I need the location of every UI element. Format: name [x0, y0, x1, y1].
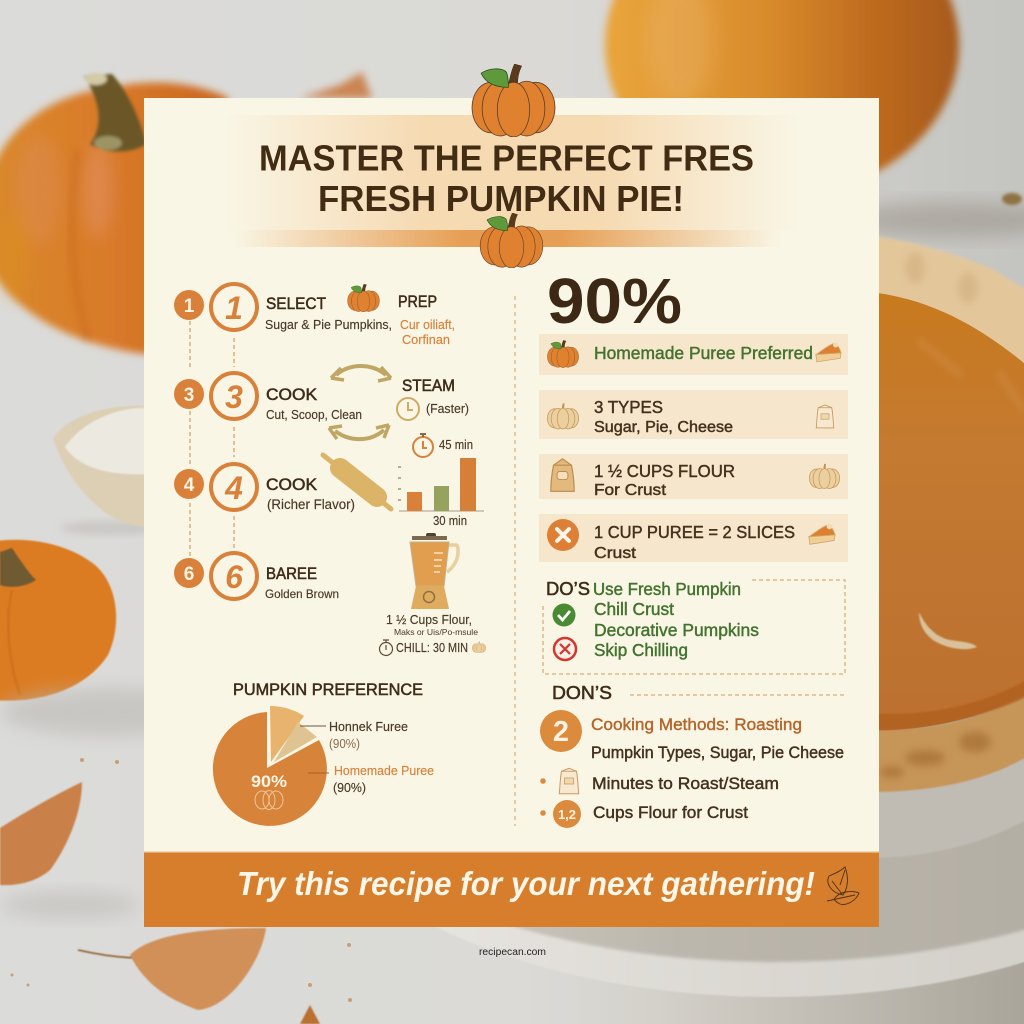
- step 4 badges: 4: [184, 475, 195, 496]
- stat row: flour: For Crust: [594, 482, 667, 499]
- icon: check: [552, 604, 576, 626]
- legend: slice label: [329, 720, 408, 751]
- background: fallen leaf bottom: [78, 928, 320, 1024]
- background: bowl shadow: [60, 521, 160, 535]
- background: pie filling edge shadow: [870, 678, 1024, 730]
- list item: cups flour: [540, 800, 748, 828]
- legend: main label: (90%): [333, 780, 366, 795]
- stat row: homemade puree: [539, 334, 848, 375]
- background: pie dish: [870, 745, 1024, 858]
- step 6 badges: [174, 553, 257, 599]
- list: cooking methods: Cooking Methods: Roasting: [591, 715, 802, 734]
- panel: steps timeline: [174, 284, 486, 656]
- panel background: [144, 98, 879, 927]
- title: FRESH PUMPKIN PIE!: [318, 178, 684, 219]
- list: cooking methods: 2: [553, 716, 569, 748]
- blender caption: 1 ½ Cups Flour,: [386, 612, 472, 627]
- step text: cook richer: COOK: [266, 475, 318, 494]
- step 4 badges: 4: [224, 470, 243, 506]
- icon: chill timer: [380, 640, 392, 656]
- list item: minutes: Minutes to Roast/Steam: [592, 774, 779, 793]
- title: MASTER THE PERFECT FRES: [259, 138, 754, 178]
- stat row: flour: 1 ½ CUPS FLOUR: [594, 461, 735, 481]
- icon: stopwatch: [413, 434, 433, 457]
- icon: rolling pin: [323, 455, 391, 509]
- heading: do's: DO’S: [546, 579, 590, 599]
- background: plate inner: [294, 518, 1024, 962]
- title: [259, 138, 754, 219]
- step 4 badges: [174, 464, 257, 510]
- background: filling highlights: [918, 340, 1024, 410]
- background: crumbs: [10, 758, 352, 1002]
- step text: steam: (Faster): [426, 401, 469, 416]
- step text: cook: Cut, Scoop, Clean: [266, 408, 362, 422]
- icon: clock: [397, 398, 419, 420]
- step text: steam: STEAM: [402, 376, 455, 395]
- stat row: types: Sugar, Pie, Cheese: [594, 419, 733, 436]
- icon: pumpkin below title: [480, 213, 543, 268]
- pie chart: [213, 706, 329, 826]
- arrow: curved top: [331, 366, 391, 381]
- list: do's items: Use Fresh Pumpkin: [593, 579, 741, 599]
- list: do's items: Decorative Pumpkins: [594, 620, 759, 640]
- stat row: puree slices: 1 CUP PUREE = 2 SLICES: [594, 522, 795, 542]
- background: bowl with sugar: [53, 406, 150, 526]
- step text: prep: PREP: [398, 292, 437, 311]
- arrow: curved bottom: [329, 425, 389, 439]
- list: do's items: [593, 579, 759, 660]
- list: do's items: Chill Crust: [594, 599, 674, 619]
- source credit: recipecan.com: [479, 947, 546, 958]
- step 3 badges: [174, 373, 257, 419]
- blender caption: CHILL: 30 MIN: [396, 641, 468, 655]
- background: crust scallop shadows: [905, 252, 978, 304]
- blender caption: [386, 612, 478, 655]
- step 6 badges: 6: [184, 564, 194, 585]
- step 1 badges: 1: [225, 290, 243, 326]
- background: crust browning: [880, 732, 991, 778]
- list: cooking methods: [540, 710, 844, 762]
- icon: leaves: [827, 867, 859, 904]
- background: leaf shadow: [0, 891, 140, 919]
- background: pie crust bottom: [870, 690, 1024, 792]
- panel: recipe card: [144, 64, 879, 927]
- footer band: [144, 851, 879, 927]
- step text: prep: [398, 292, 455, 347]
- step text: prep: Corfinan: [402, 333, 450, 347]
- step 3 badges: 3: [184, 385, 194, 406]
- stat row: types: 3 TYPES: [594, 397, 663, 417]
- stat row: homemade puree: Homemade Puree Preferred: [594, 343, 813, 363]
- legend: slice label: (90%): [329, 737, 360, 751]
- step text: cook: [266, 385, 362, 422]
- step text: cook: COOK: [266, 385, 318, 404]
- step 1 badges: [174, 284, 257, 330]
- background: blurred crumb top right: [1002, 193, 1022, 205]
- icon: pumpkin above title: [472, 64, 555, 137]
- icon: tiny pumpkin: [472, 642, 486, 653]
- background: plate rim: [298, 523, 1024, 997]
- step text: steam: [402, 376, 469, 416]
- blender caption: Maks or Uis/Po-msule: [394, 627, 478, 637]
- bar chart: cooking time: 30 min: [433, 513, 467, 528]
- background: pumpkin seed on pie: [919, 612, 977, 649]
- bar chart: cooking time: [398, 458, 484, 528]
- step text: cook richer: (Richer Flavor): [267, 497, 355, 512]
- step text: baree: [265, 564, 339, 601]
- stat row: types: [539, 390, 848, 439]
- list item: cups flour: Cups Flour for Crust: [593, 803, 748, 822]
- list: do's items: Skip Chilling: [594, 640, 688, 660]
- legend: main label: Homemade Puree: [334, 763, 434, 778]
- icon: blender: [410, 533, 458, 609]
- heading: don'ts: DON’S: [552, 682, 612, 703]
- background: fallen leaf left: [0, 782, 82, 885]
- list item: cups flour: 1,2: [558, 807, 576, 822]
- footer call to action: Try this recipe for your next gathering!: [237, 865, 815, 902]
- background: small blurred leaf behind panel: [300, 72, 372, 98]
- step text: select: [265, 294, 392, 332]
- step 1 badges: 1: [184, 296, 195, 317]
- stat row: flour: [539, 454, 848, 499]
- step text: baree: Golden Brown: [265, 587, 339, 601]
- background: small pumpkin left: [0, 540, 116, 701]
- step text: select: Sugar & Pie Pumpkins,: [265, 318, 392, 332]
- step text: cook richer: [266, 475, 355, 512]
- legend: main label: [333, 763, 434, 795]
- heading: PUMPKIN PREFERENCE: [233, 680, 423, 699]
- background: large pumpkin top right: [605, 0, 959, 195]
- big stat: 90%: [547, 265, 682, 337]
- stat row: puree slices: [539, 514, 848, 562]
- background: large pumpkin left: [0, 83, 230, 354]
- background: pie filling: [870, 292, 1024, 730]
- step 6 badges: 6: [225, 559, 243, 595]
- list: cooking methods: Pumpkin Types, Sugar, Pie Cheese: [591, 743, 844, 762]
- icon: small pumpkin: [348, 284, 379, 312]
- pie chart: 90%: [251, 772, 287, 791]
- stat row: puree slices: Crust: [594, 545, 637, 562]
- background: shadow under top pumpkin: [840, 202, 1024, 238]
- step text: baree: BAREE: [266, 564, 317, 583]
- step text: select: SELECT: [266, 294, 326, 313]
- background: pumpkin stem left: [84, 73, 146, 152]
- list item: minutes: [540, 768, 779, 794]
- step 3 badges: 3: [225, 379, 243, 415]
- center divider: [514, 296, 516, 826]
- icon: cross: [554, 638, 576, 660]
- step text: prep: Cur oiliaft,: [400, 318, 455, 332]
- background: pie crust top: [870, 236, 1024, 368]
- title banner: [222, 115, 802, 247]
- panel: pumpkin preference pie chart: [213, 680, 434, 826]
- legend: slice label: Honnek Furee: [329, 720, 408, 734]
- background: lower right table tone: [420, 900, 1024, 1024]
- label: 45 min: 45 min: [439, 437, 473, 452]
- background: small pumpkin stem: [0, 548, 36, 587]
- panel: do's box: [543, 579, 845, 674]
- background: table shadow: [0, 688, 220, 736]
